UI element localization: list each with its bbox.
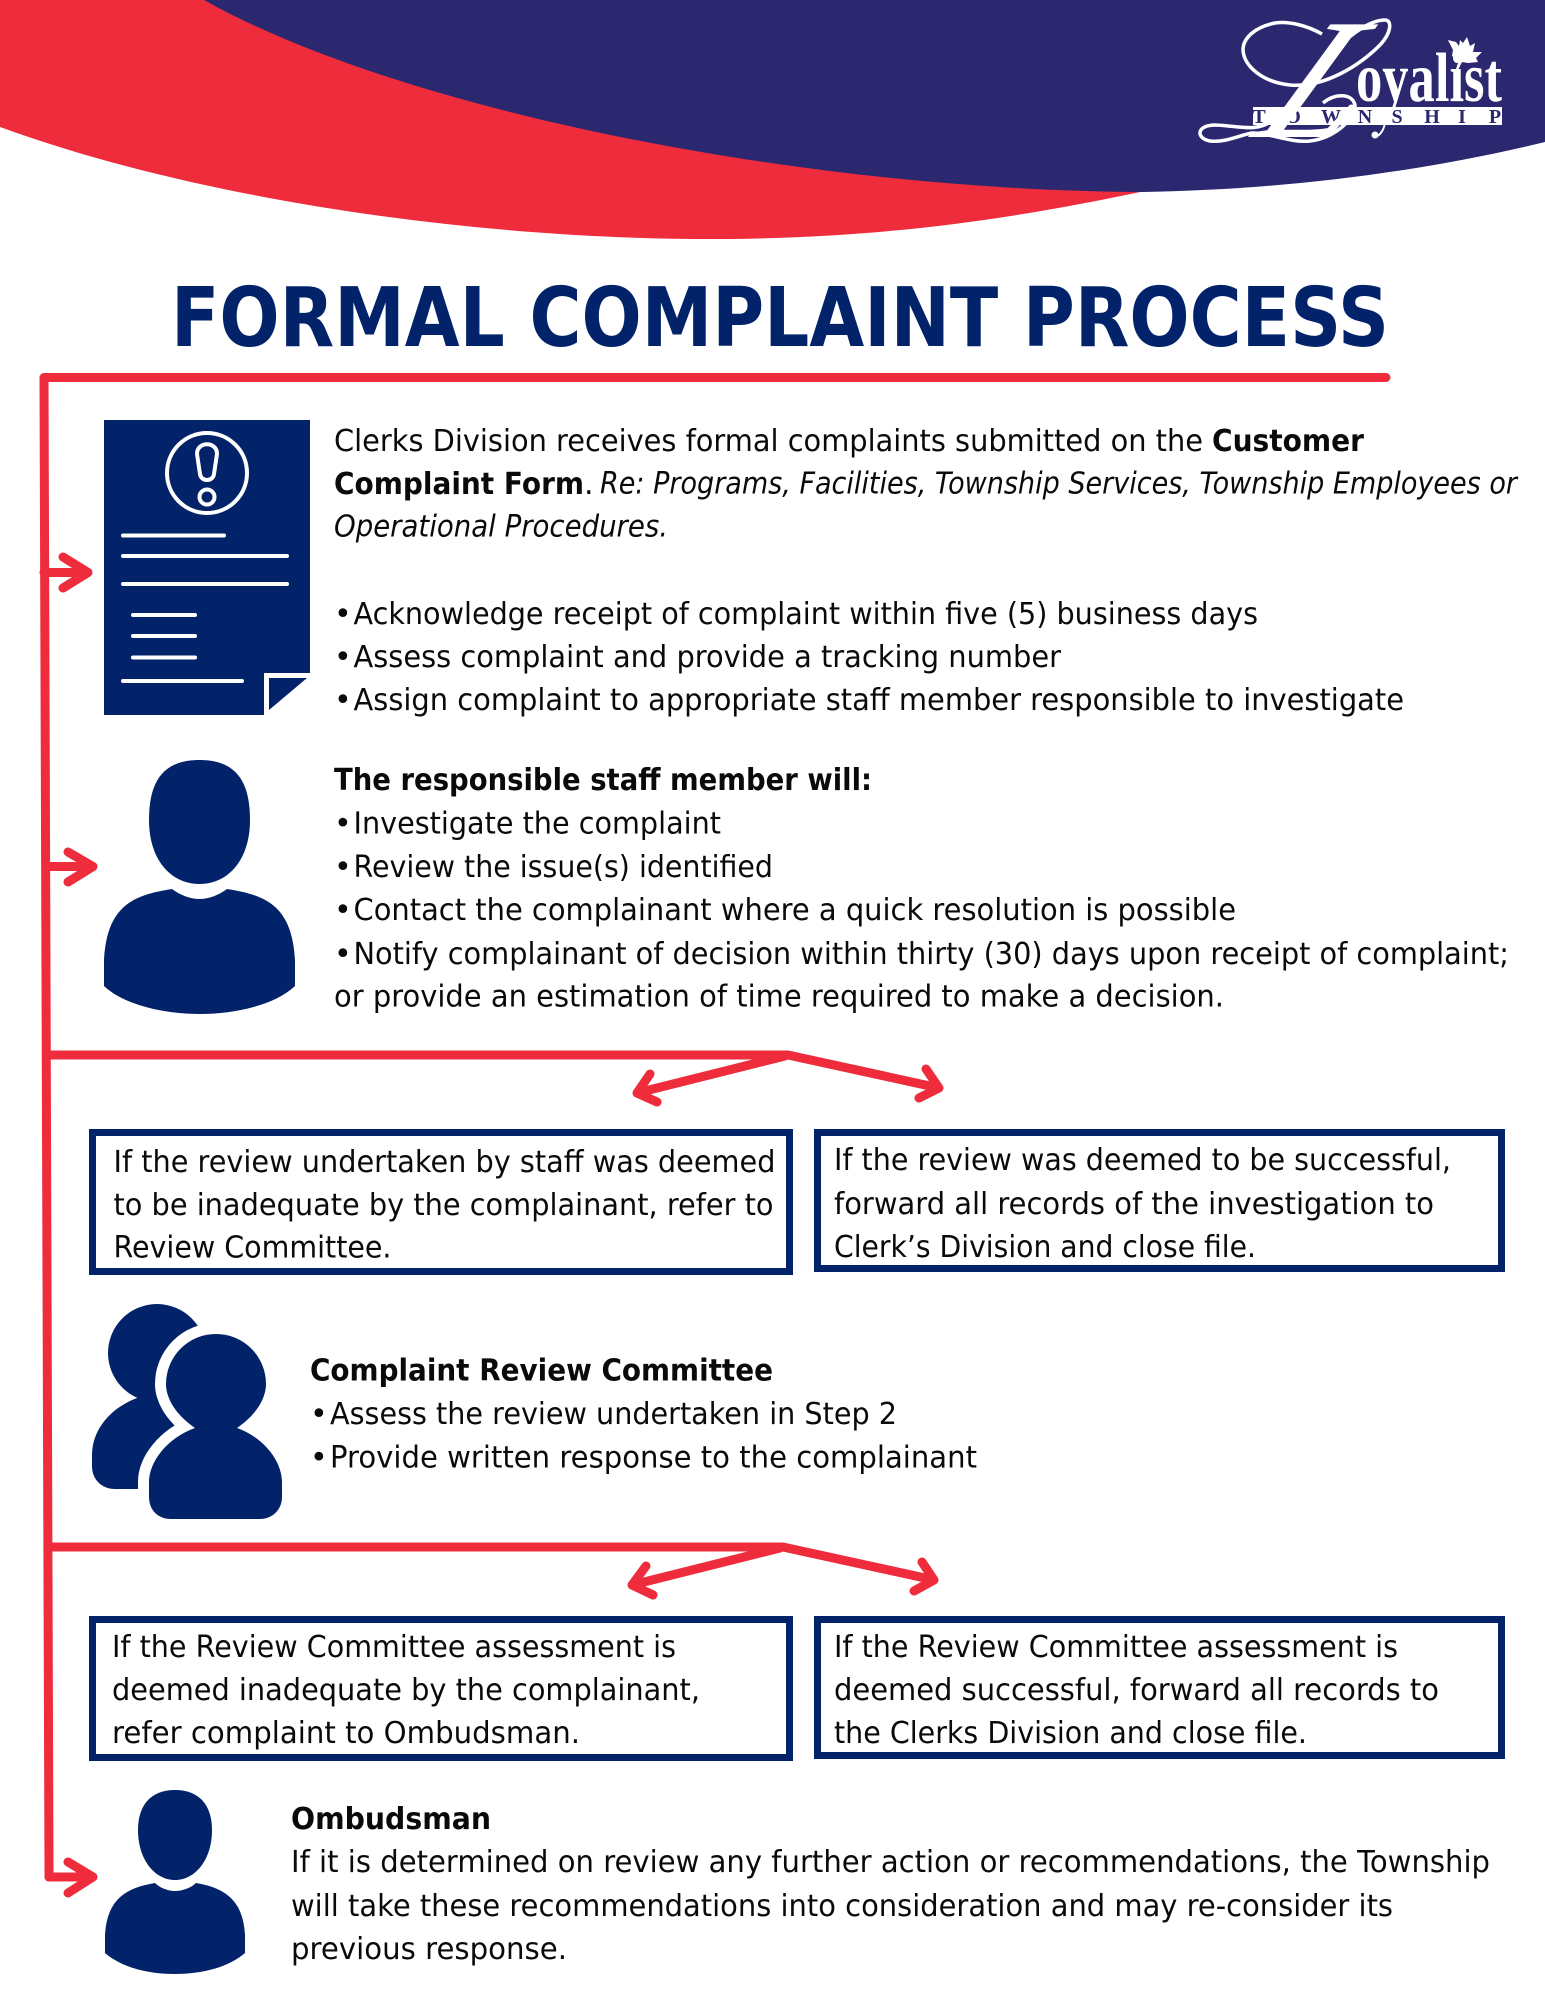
logo: Loyalist Township: [1200, 0, 1502, 174]
text: complaint review committee: [310, 1354, 977, 1476]
text: ombudsman: [291, 1802, 1490, 1967]
text: clerks division: •: [334, 640, 352, 675]
arrow: step 1: [44, 557, 88, 588]
box: review successful: Clerk’s Division and close file.: [834, 1230, 1256, 1265]
box: review successful: [818, 1132, 1502, 1268]
box: committee inadequate: deemed inadequate by the complainant,: [112, 1673, 700, 1708]
text: clerks division: [334, 424, 1518, 718]
text: ombudsman: previous response.: [291, 1932, 567, 1967]
text: responsible staff member: •: [334, 850, 352, 885]
text: complaint review committee: Complaint Review Committee: [310, 1354, 773, 1388]
box: review successful: forward all records of the investigation to: [834, 1187, 1434, 1222]
box: review inadequate: If the review undertaken by staff was deemed: [114, 1145, 776, 1180]
icon: review committee: [92, 1304, 282, 1519]
logo: Loyalist Township: oyalist: [1356, 40, 1502, 117]
box: committee successful: If the Review Committee assessment is: [834, 1630, 1398, 1665]
arrow: ombudsman: [49, 1862, 93, 1893]
red swoosh: [0, 0, 1145, 239]
text: responsible staff member: Review the issue(s) identified: [354, 850, 773, 885]
text: clerks division: Clerks Division receives formal complaints submitted on the: [334, 424, 1203, 459]
box: committee successful: the Clerks Division and close file.: [834, 1716, 1307, 1751]
logo: Loyalist Township: TOWNSHIP: [1252, 106, 1501, 128]
text: complaint review committee: •: [310, 1397, 328, 1432]
text: responsible staff member: [334, 763, 1509, 1014]
text: ombudsman: If it is determined on review any further action or recommendations, the Township: [291, 1845, 1490, 1880]
box: committee successful: deemed successful, forward all records to: [834, 1673, 1439, 1708]
title: FORMAL COMPLAINT PROCESS: [171, 271, 1389, 366]
text: clerks division: .: [584, 467, 594, 502]
box: committee successful: [818, 1620, 1502, 1756]
text: responsible staff member: •: [334, 806, 352, 842]
text: ombudsman: will take these recommendations into consideration and may re-consider its: [291, 1889, 1393, 1924]
box: committee inadequate: If the Review Committee assessment is: [112, 1630, 676, 1665]
box: committee inadequate: [92, 1620, 790, 1758]
icon: staff member: [104, 760, 295, 1014]
text: clerks division: Assess complaint and provide a tracking number: [354, 640, 1062, 675]
text: clerks division: •: [334, 597, 352, 632]
box: committee inadequate: refer complaint to Ombudsman.: [112, 1716, 580, 1751]
text: clerks division: Customer: [1212, 424, 1364, 459]
text: clerks division: •: [334, 683, 352, 718]
icon: ombudsman: [105, 1790, 245, 1974]
text: complaint review committee: Assess the review undertaken in Step 2: [330, 1397, 897, 1432]
text: responsible staff member: The responsible staff member will:: [334, 763, 872, 798]
text: responsible staff member: •: [334, 893, 352, 928]
text: responsible staff member: •: [334, 937, 352, 972]
box: review successful: If the review was deemed to be successful,: [834, 1143, 1451, 1178]
arrow: step 2: [46, 852, 93, 882]
header banner: [0, 0, 1545, 239]
text: clerks division: Complaint Form: [334, 467, 584, 502]
text: ombudsman: Ombudsman: [291, 1802, 491, 1837]
text: complaint review committee: •: [310, 1440, 328, 1476]
text: clerks division: Acknowledge receipt of complaint within five (5) business days: [354, 597, 1258, 632]
box: review inadequate: [92, 1132, 790, 1272]
text: responsible staff member: Notify complainant of decision within thirty (30) days upon receipt of complaint;: [354, 937, 1509, 972]
branch arrows: after committee review: [50, 1547, 934, 1595]
box: review inadequate: Review Committee.: [114, 1230, 392, 1266]
text: responsible staff member: or provide an estimation of time required to make a decision.: [334, 980, 1224, 1014]
branch arrows: after staff review: [48, 1055, 939, 1102]
text: responsible staff member: Contact the complainant where a quick resolution is possible: [354, 893, 1236, 928]
text: clerks division: Assign complaint to appropriate staff member responsible to investigate: [354, 683, 1404, 718]
text: complaint review committee: Provide written response to the complainant: [330, 1440, 977, 1476]
box: review inadequate: to be inadequate by the complainant, refer to: [114, 1188, 774, 1223]
main process line with step arrows: [44, 378, 1386, 1893]
text: clerks division: Operational Procedures.: [334, 510, 668, 544]
navy swoosh: [204, 0, 1545, 192]
icon: complaint document: [104, 420, 310, 715]
text: responsible staff member: Investigate the complaint: [354, 806, 721, 842]
